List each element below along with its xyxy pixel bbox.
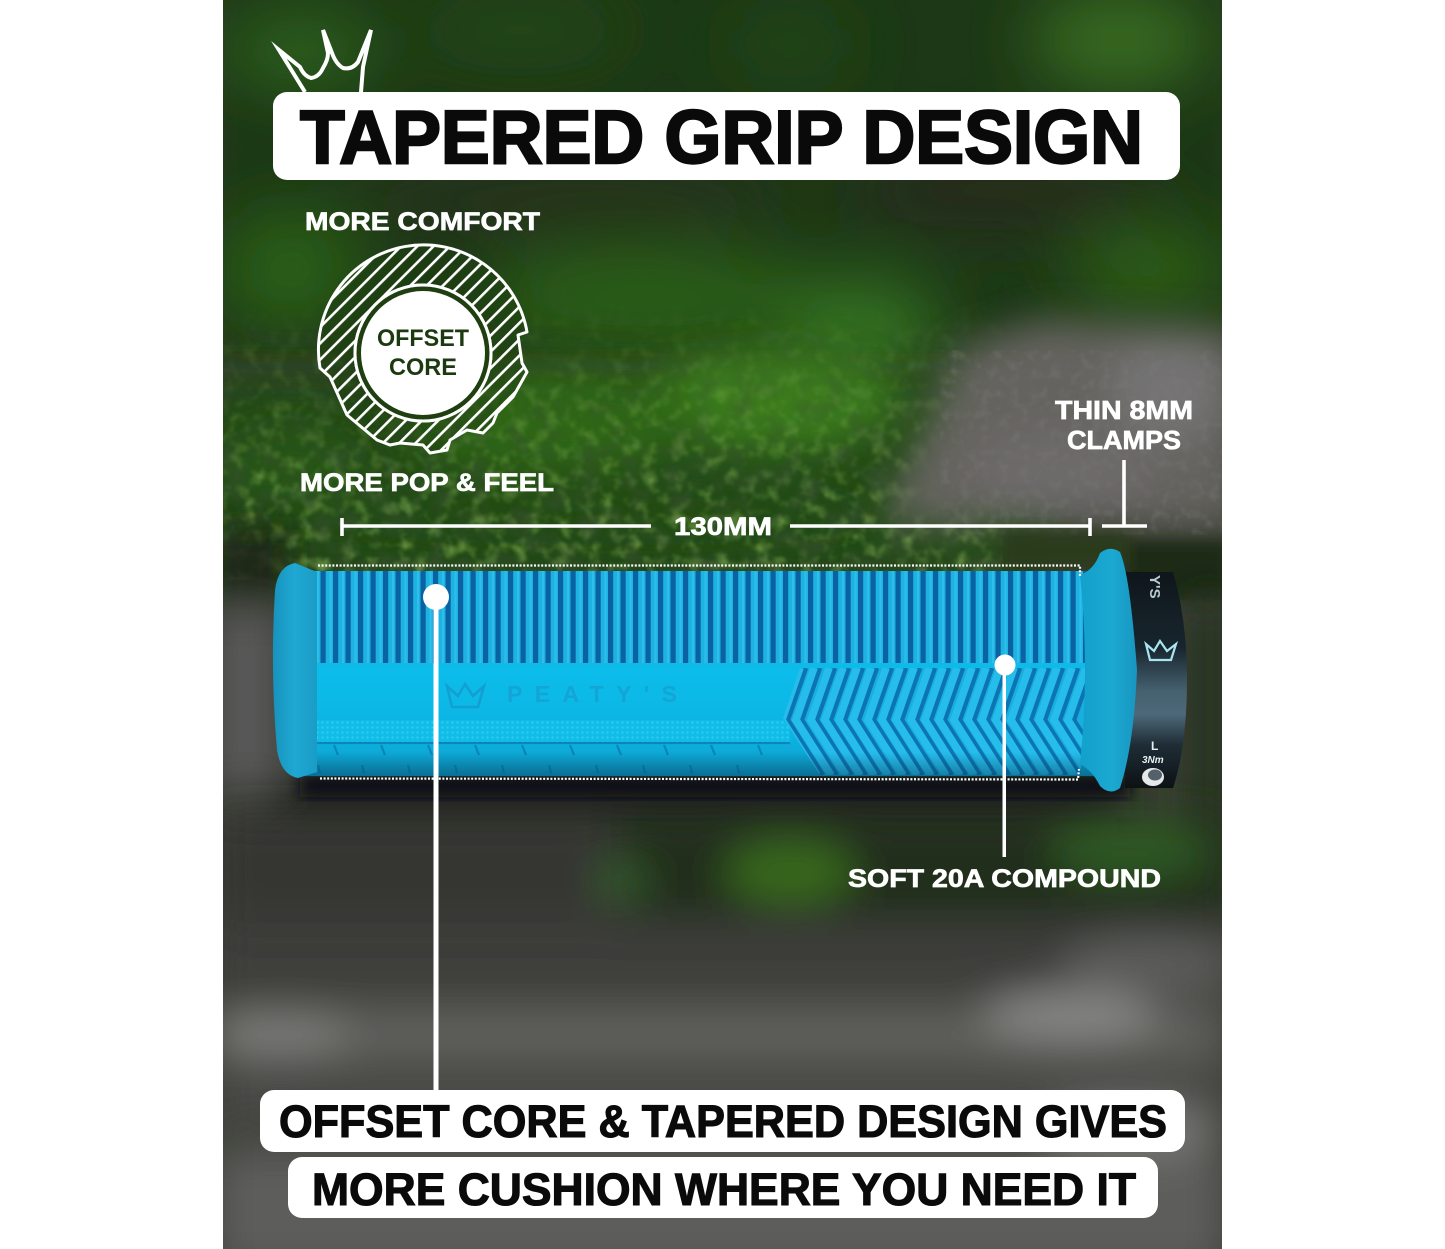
title banner: TAPERED GRIP DESIGN (300, 95, 1143, 179)
tread ticks (310, 743, 790, 773)
clamp: Y'S (1146, 575, 1163, 599)
lower moss and grey blur (210, 815, 1240, 1249)
mid moss (200, 375, 1050, 590)
dark and grey surroundings of the grip (223, 502, 1222, 835)
callout: thin 8mm clamps: CLAMPS (1067, 425, 1181, 455)
callout: soft 20a compound: SOFT 20A COMPOUND (848, 865, 1161, 893)
inner ring (355, 285, 491, 421)
length dimension: 130mm (342, 513, 1090, 541)
stippled band (310, 720, 790, 742)
label: more comfort: MORE COMFORT (305, 208, 540, 236)
label: more pop and feel: MORE POP & FEEL (300, 469, 554, 497)
core label: CORE (389, 354, 457, 381)
diagram: offset core cross-section (318, 245, 527, 453)
background photo: moss and rock (200, 0, 1250, 1249)
bottom banner: line one: OFFSET CORE & TAPERED DESIGN GIVES (279, 1096, 1167, 1147)
chevron tread (782, 668, 1109, 775)
icon: crown on clamp (1146, 641, 1176, 660)
bottom shading (300, 752, 1095, 777)
clamp (1125, 572, 1187, 788)
clamp bolt (1142, 768, 1164, 786)
bottom banner: line two: MORE CUSHION WHERE YOU NEED IT (312, 1164, 1136, 1215)
clamp: L (1151, 739, 1158, 753)
length dimension: 130mm: 130MM (674, 513, 772, 541)
right flange (1080, 549, 1137, 792)
callout: thin 8mm clamps (1055, 395, 1193, 526)
dark moss beside clamp (1000, 530, 1230, 600)
core label: OFFSET (377, 325, 469, 352)
callout: offset core pointer (423, 584, 449, 1092)
callout: soft 20a compound (848, 654, 1161, 893)
callout: thin 8mm clamps: THIN 8MM (1055, 395, 1193, 425)
grey rock, top right (880, 320, 1240, 525)
grip main body (300, 571, 1095, 776)
infographic: tapered grip design (223, 0, 1222, 1249)
left end cap (273, 563, 317, 778)
ribs (308, 571, 1090, 663)
grip shadow (300, 775, 1130, 797)
core disc (361, 291, 485, 415)
dotted outline of taper (318, 566, 1080, 780)
clamp: 3Nm (1142, 755, 1164, 766)
brand mark on grip: PEATY'S (507, 681, 677, 707)
core label (377, 325, 469, 381)
icon: crown logo (279, 30, 371, 92)
grip (273, 549, 1187, 797)
